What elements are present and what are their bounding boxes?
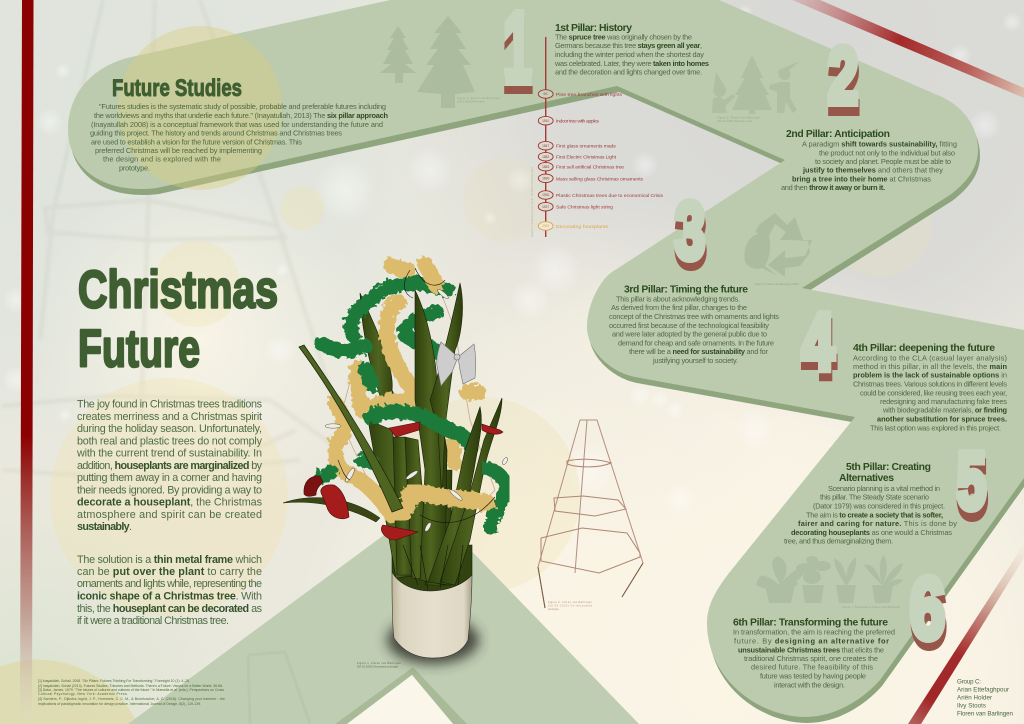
- text: future studies intro: "Futures studies is the systematic study of possible, probable and preferable futures including: [99, 102, 386, 111]
- references: [1] Inayatullah, Sohail. 2008. "Six Pillars: Futures Thinking For Transforming." Foresight 10 (1): 4–28.: [38, 679, 190, 683]
- main text: introduction: addition, houseplants are marginalized by: [77, 460, 263, 472]
- upper gold garland: [336, 264, 478, 515]
- text: pillar 4 body: problem is the lack of sustainable options in: [853, 371, 1007, 380]
- text: pillar 1 body: Germans because this tree stays green all year,: [555, 41, 702, 50]
- number 3: 3: [676, 194, 706, 283]
- heading: pillar 5: Alternatives: [839, 473, 894, 484]
- main text: introduction: [76, 398, 263, 533]
- number 5: [957, 436, 987, 534]
- caption: frame figure: (20-01-2020) Un-decorated: [548, 604, 593, 608]
- timeline: 1890: [542, 176, 549, 180]
- pillar 1: history: [554, 23, 709, 76]
- number 5: 5: [957, 436, 986, 525]
- text: pillar 3 body: [609, 294, 779, 365]
- number 3: 3: [675, 186, 705, 275]
- text: pillar 3 body: there will be a need for sustainability and for: [629, 347, 769, 356]
- heading: pillar 1: 1st Pillar: History: [555, 23, 632, 34]
- caption: frame figure: prototype: [548, 607, 559, 611]
- flower stem: [283, 498, 380, 522]
- frame inside plant: [340, 290, 495, 507]
- number 2: [828, 31, 859, 129]
- text: pillar 3 body: justifying yourself to society.: [652, 356, 738, 365]
- text: pillar 5 body: this pillar. The Steady State scenario: [820, 493, 929, 502]
- references: implications of paradigmatic innovation for design practice. International Journal of Design, 8(2), 119-139.: [38, 702, 201, 706]
- icon: pine trees: [380, 16, 475, 108]
- red bar left: [20, 0, 34, 724]
- main text: introduction: during the holiday season. Unfortunately,: [77, 423, 262, 435]
- pillar 2: anticipation: [781, 129, 957, 192]
- text: pillar 4 body: Christmas trees. Various solutions in different levels: [853, 379, 1007, 388]
- main text: introduction: both real and plastic trees do not comply: [77, 436, 263, 448]
- number 5: 5: [958, 445, 987, 534]
- timeline: Pine tree branches with lights: [556, 92, 623, 98]
- main text: solution: [77, 554, 263, 627]
- main text: introduction: The joy found in Christmas trees traditions: [77, 398, 263, 410]
- timeline: Decorating housplants: [556, 224, 609, 230]
- wire frame prototype: [538, 420, 643, 608]
- timeline: First glass ornaments made: [556, 144, 616, 150]
- text: pillar 3 body: concept of the Christmas tree with ornaments and lights: [609, 312, 779, 321]
- timeline: Safe Christmas light string: [556, 205, 613, 211]
- light wire: [338, 268, 495, 522]
- text: pillar 2 body: [781, 140, 957, 192]
- text: pillar 3 body: As derived from the first pillar, changes to the: [611, 303, 747, 312]
- heading: pillar 2: 2nd Pillar: Anticipation: [786, 129, 890, 140]
- pillar 4: deepening the future: [853, 343, 1007, 432]
- text: pillar 5 body: fairer and caring for nature. This is done by: [798, 519, 957, 528]
- main text: introduction: with the current trend of sustainability. In: [76, 448, 262, 460]
- pot interior and stem base: [392, 545, 472, 591]
- text: pillar 1 body: was celebrated. Later, they were taken into homes: [554, 59, 709, 68]
- main text: introduction: their needs ignored. By providing a way to: [77, 484, 262, 496]
- text: pillar 2 body: to society and planet. People must be able to: [815, 157, 951, 166]
- main text: introduction: putting them away in a corner and having: [77, 472, 262, 484]
- references: Cultural Psychology. New York: Academic Press.: [38, 692, 128, 696]
- pot: [392, 572, 472, 658]
- number 3: [675, 186, 706, 283]
- text: pillar 2 body: A paradigm shift towards sustainability, fitting: [802, 140, 957, 148]
- group credits: Ariën Holder: [957, 694, 992, 701]
- white light bulbs: [325, 288, 509, 532]
- text: pillar 4 body: This last option was explored in this project.: [870, 423, 1001, 432]
- pillar 5: creating alternatives: [784, 462, 957, 546]
- text: pillar 2 body: the product not only to the individual but also: [819, 148, 955, 157]
- text: pillar 1 body: including the winter period when the shortest day: [555, 50, 704, 59]
- text: pillar 1 body: The spruce tree was originally chosen by the: [555, 32, 692, 42]
- front leaf: [299, 345, 403, 512]
- upper green garland: [322, 284, 448, 352]
- references: [4] Sanders, P., Dijkstra-Ingrid, J. P., Hummels, C. C. M., & Brombacher, A. C. (2018). Changing your hammer - the: [38, 697, 225, 701]
- timeline: Plastic Christmas trees due to economical Crisis: [556, 193, 664, 199]
- main text: solution: if it were a traditional Christmas tree.: [77, 615, 229, 627]
- pillar 3: timing the future: [609, 284, 779, 365]
- stem lines in pot: [403, 545, 463, 590]
- timeline: 1847: [542, 144, 549, 148]
- caption: timeline figure: Figure 3. Information from Group: Timeline Christmas trees: [530, 166, 534, 237]
- red band bottom right: [908, 544, 1024, 724]
- text: pillar 4 body: [853, 353, 1007, 432]
- timeline: First Electric Christmas Light: [556, 155, 617, 161]
- number 2: 2: [829, 40, 859, 129]
- caption: houseplants: Figure 7. Designed by Floren van Barlingen: [842, 605, 901, 609]
- text: pillar 5 body: decorating houseplants as one would a Christmas: [791, 528, 952, 537]
- number 6: 6: [911, 569, 946, 665]
- caption: plant figure: (20-01-2020) Decorated prototype: [357, 664, 399, 668]
- text: pillar 4 body: with biodegradable materials, or finding: [882, 406, 1007, 415]
- number 2: 2: [828, 31, 858, 120]
- main text: solution: can be put over the plant to carry the: [77, 566, 262, 578]
- text: pillar 5 body: (Dator 1979) was considered in this project.: [813, 501, 945, 510]
- decorative circles: [0, 158, 932, 724]
- timeline: First sell artificial Christmas tree: [556, 165, 624, 171]
- group credits: Floren van Barlingen: [957, 710, 1014, 717]
- lower gold band: [392, 490, 487, 515]
- title: Christmas Future: [78, 260, 278, 378]
- text: pillar 3 body: and were later adopted by the general public due to: [612, 330, 767, 339]
- text: pillar 1 body: and the decoration and lights changed over time.: [555, 68, 702, 76]
- lower left green triangle: [128, 504, 639, 724]
- icon: four houseplants: [756, 555, 903, 603]
- text: pillar 6 body: traditional Christmas spirit, one creates the: [744, 654, 878, 663]
- text: pillar 5 body: [784, 484, 957, 546]
- text: pillar 6 body: interact with the design.: [774, 680, 845, 689]
- heading: Future Studies: Future Studies: [112, 75, 242, 102]
- text: pillar 6 body: [733, 628, 895, 689]
- yellow circle over ribbon: [118, 26, 282, 190]
- text: pillar 2 body: and then throw it away or burn it.: [781, 183, 885, 192]
- text: pillar 1 body: [554, 32, 709, 76]
- number 1: [503, 0, 532, 112]
- right green garland: [486, 468, 505, 527]
- main text: introduction: decorate a houseplant, the Christmas: [77, 496, 263, 508]
- text: pillar 6 body: desired future. The feasibility of this: [751, 663, 873, 672]
- text: future studies intro: guiding this project. The history and trends around Christmas and Christmas trees: [90, 129, 342, 138]
- pillar 6: transforming the future: [733, 618, 895, 689]
- caption: gnomes: Figure 5. Floren van Barlingen: [717, 116, 761, 120]
- text: pillar 4 body: redesigning and manufacturing fake trees: [880, 397, 1007, 406]
- number 1: 1: [503, 0, 532, 112]
- references: [2] Inayatullah, Sohail (2013). Futures Studies: Theories and Methods. There's a Future: Visions for a Better World, 36-66.: [38, 684, 223, 688]
- text: pillar 3 body: This pillar is about acknowledging trends.: [616, 294, 740, 304]
- mid green garland: [323, 370, 470, 476]
- front upper leaves: [415, 283, 463, 585]
- text: future studies intro: the design and is explored with the: [103, 155, 221, 164]
- timeline: 1882: [542, 155, 549, 159]
- main text: introduction: atmosphere and spirit can be created: [77, 509, 262, 521]
- heading: pillar 3: 3rd Pillar: Timing the future: [624, 284, 748, 296]
- timeline: 1510: [542, 119, 549, 123]
- caption: plant figure: Figure 1. Floren van Barlingen: [357, 661, 402, 665]
- side leaves: [428, 398, 502, 585]
- text: future studies intro: prototype.: [119, 164, 150, 172]
- red band top right: [792, 0, 1024, 98]
- group credits: Ilvy Stoots: [957, 702, 986, 709]
- text: pillar 4 body: could be considered, like reusing trees each year,: [860, 388, 1007, 397]
- timeline: 1927: [542, 205, 549, 209]
- main text: solution: The solution is a thin metal frame which: [77, 554, 262, 566]
- text: pillar 6 body: unsustainable Christmas trees that elicits the: [738, 645, 884, 654]
- title: Christmas Future: Christmas: [78, 260, 278, 320]
- timeline: [538, 37, 664, 237]
- anthurium flowers: [304, 422, 503, 540]
- timeline: 2020: [542, 224, 549, 228]
- caption: gnomes: (20-01-2020) Planting a tree: [717, 119, 753, 123]
- back leaves: [360, 293, 452, 585]
- caption: pine trees: (20-01-2020) Pine trees: [457, 100, 485, 104]
- references: [3] Dator, James. 1979. "The futures of cultures and cultures of the future." In Marsella et al. (eds.), Perspectives on Cross: [38, 688, 224, 692]
- caption: frame figure: [548, 600, 593, 611]
- heading: pillar 5: [839, 462, 931, 484]
- main text: solution: this, the houseplant can be decorated as: [77, 603, 263, 615]
- references: [38, 679, 225, 706]
- caption: gnomes: [717, 116, 761, 123]
- text: pillar 4 body: method in this pillar, in all the levels, the main: [853, 362, 1007, 371]
- heading: pillar 4: 4th Pillar: deepening the future: [853, 343, 995, 354]
- timeline: 1930: [542, 193, 549, 197]
- text: pillar 6 body: In transformation, the aim is reaching the preferred: [733, 628, 895, 637]
- text: pillar 5 body: Scenario planning is a vital method in: [828, 484, 940, 493]
- text: pillar 5 body: tree, and thus demarginalizing them.: [784, 537, 893, 546]
- text: pillar 2 body: bring a tree into their home at Christmas: [792, 174, 931, 183]
- main text: solution: iconic shape of a Christmas tree. With: [77, 590, 262, 602]
- timeline: Indoor tree with apples: [556, 119, 600, 125]
- group credits: [957, 678, 1014, 717]
- icon: gnomes carrying a tree: [712, 55, 800, 114]
- text: future studies intro: [90, 102, 388, 172]
- text: pillar 2 body: justify to themselves and others that they: [802, 166, 943, 175]
- number 4: 4: [803, 305, 835, 394]
- main text: introduction: sustainably.: [77, 521, 132, 533]
- timeline: BC: [543, 92, 549, 96]
- main text: solution: ornaments and lights while, representing the: [77, 578, 262, 590]
- caption: frame figure: Figure 2. Floren van Barlingen: [548, 600, 593, 604]
- main text: introduction: creates merriness and a Christmas spirit: [77, 411, 262, 423]
- text: future studies intro: (Inayatullah 2008) is a conceptual framework that was used for understanding the future and: [91, 120, 383, 129]
- title: Christmas Future: Future: [78, 320, 200, 378]
- icon: recycling and leaf: [744, 213, 812, 277]
- caption: pine trees: [457, 96, 501, 104]
- text: pillar 6 body: future. By designing an alternative for: [734, 636, 889, 645]
- caption: pine trees: Figure 4. Floren van Barlingen: [457, 96, 501, 100]
- heading: pillar 5: 5th Pillar: Creating: [846, 462, 931, 473]
- decorated houseplant: [283, 264, 509, 664]
- group credits: Arian Ettefaghpour: [957, 686, 1009, 693]
- timeline: 1883: [542, 165, 549, 169]
- group credits: Group C:: [957, 678, 981, 685]
- pot shadow: [387, 616, 479, 664]
- caption: plant figure: [357, 661, 402, 668]
- silver bow: [437, 342, 476, 386]
- caption: recycling: Figure 6. Floren van Barlingen (2020): [755, 282, 799, 286]
- timeline: Mass selling glass Christmas ornaments: [556, 176, 644, 182]
- text: pillar 4 body: another substitution for spruce trees.: [877, 415, 1007, 424]
- text: pillar 3 body: occurred first because of the technological feasibility: [609, 321, 769, 330]
- text: future studies intro: are used to establish a vision for the future version of Christmas. This: [91, 138, 302, 146]
- heading: pillar 6: 6th Pillar: Transforming the future: [733, 618, 888, 629]
- text: future studies intro: the worldviews and myths that underlie each future." (Inayatullah, 2013) The six pillar approach: [94, 111, 388, 120]
- text: pillar 5 body: The aim is to create a society that is softer,: [806, 510, 943, 519]
- text: pillar 4 body: According to the CLA (casual layer analysis): [853, 353, 1007, 362]
- number 6: 6: [910, 561, 945, 657]
- number 4: 4: [802, 297, 834, 386]
- text: pillar 3 body: demand for cheap and safe ornaments. In the future: [618, 338, 774, 348]
- text: pillar 6 body: future was tested by having people: [760, 672, 866, 681]
- text: future studies intro: preferred Christmas will be reached by implementing: [95, 146, 262, 155]
